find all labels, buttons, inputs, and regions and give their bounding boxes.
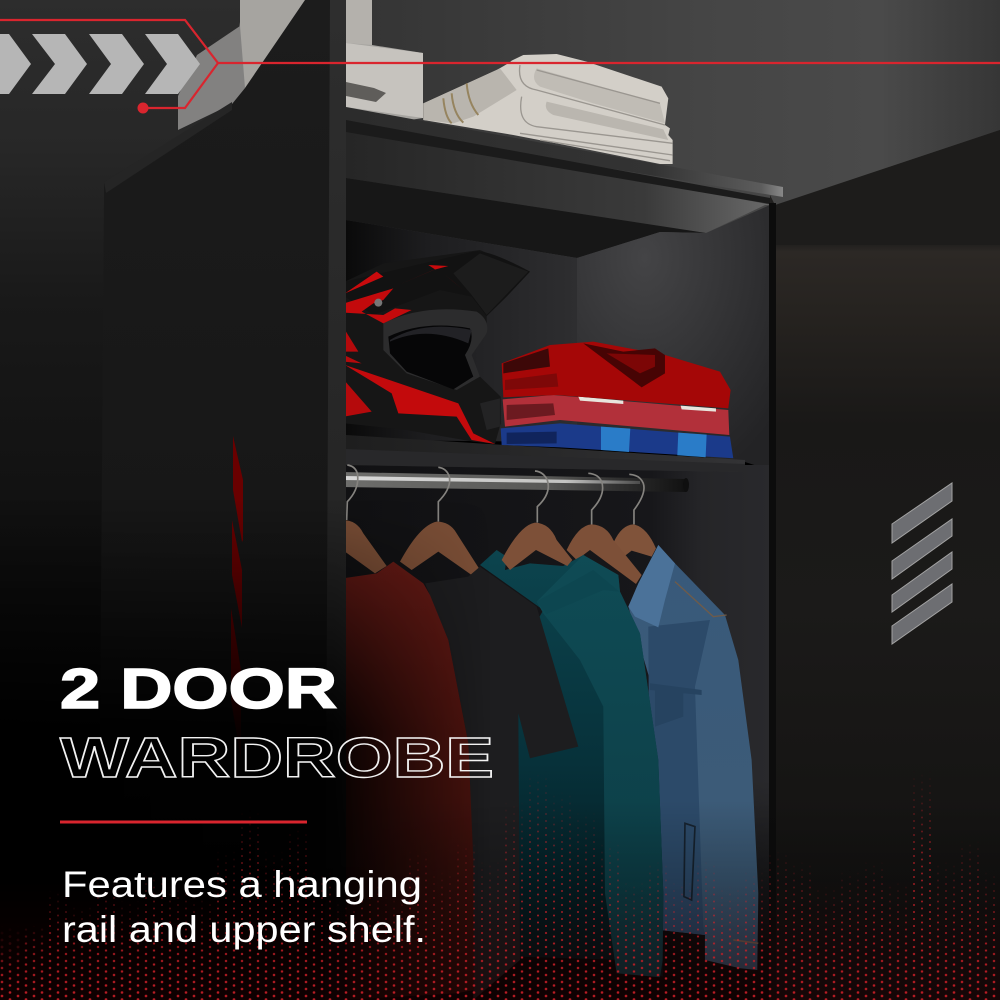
circuit line graphic	[0, 20, 1000, 114]
halftone red dots	[0, 770, 1000, 1000]
jacket collar	[628, 545, 675, 627]
back wall upper	[346, 220, 577, 442]
door top edge	[104, 102, 232, 193]
denim jacket	[628, 545, 758, 970]
folded shirts	[501, 342, 733, 458]
hanging clothes	[343, 465, 758, 1000]
hanging rail	[342, 472, 689, 492]
towels	[423, 54, 673, 164]
side wall upper	[577, 205, 770, 470]
red door graphic	[231, 436, 243, 760]
right door	[769, 130, 1000, 1000]
description: rail and upper shelf.	[62, 909, 426, 950]
hanger hooks	[347, 465, 644, 525]
back wall lower	[346, 465, 770, 1000]
blue shirt	[501, 423, 733, 458]
hanger 5	[614, 524, 656, 558]
storage boxes	[178, 0, 423, 130]
wardrobe interior	[346, 107, 783, 1000]
pink-red shirt	[503, 395, 729, 435]
red shirt	[502, 342, 731, 408]
left door	[98, 0, 346, 1000]
hanger 3	[502, 523, 572, 570]
dark overlays	[0, 516, 776, 1000]
hanger 4	[567, 524, 642, 584]
middle shelf	[346, 435, 745, 472]
door inner edge	[325, 0, 346, 1000]
hanger 2	[400, 522, 479, 577]
chevron arrows	[0, 34, 200, 94]
title: 2 DOOR: 2 DOOR	[60, 657, 337, 721]
description: Features a hanging	[62, 864, 422, 905]
title: WARDROBE: WARDROBE	[60, 726, 494, 790]
hanger 1	[343, 520, 387, 573]
description	[62, 864, 426, 950]
door vent stripes	[892, 483, 952, 644]
teal hoodie	[480, 550, 663, 977]
soffit	[346, 178, 706, 258]
top shelf	[346, 107, 783, 233]
divider	[60, 820, 307, 824]
helmet	[344, 250, 530, 444]
red hoodie	[343, 562, 474, 1000]
black t-shirt	[425, 567, 578, 1000]
lower wall floor fade	[346, 780, 770, 1000]
